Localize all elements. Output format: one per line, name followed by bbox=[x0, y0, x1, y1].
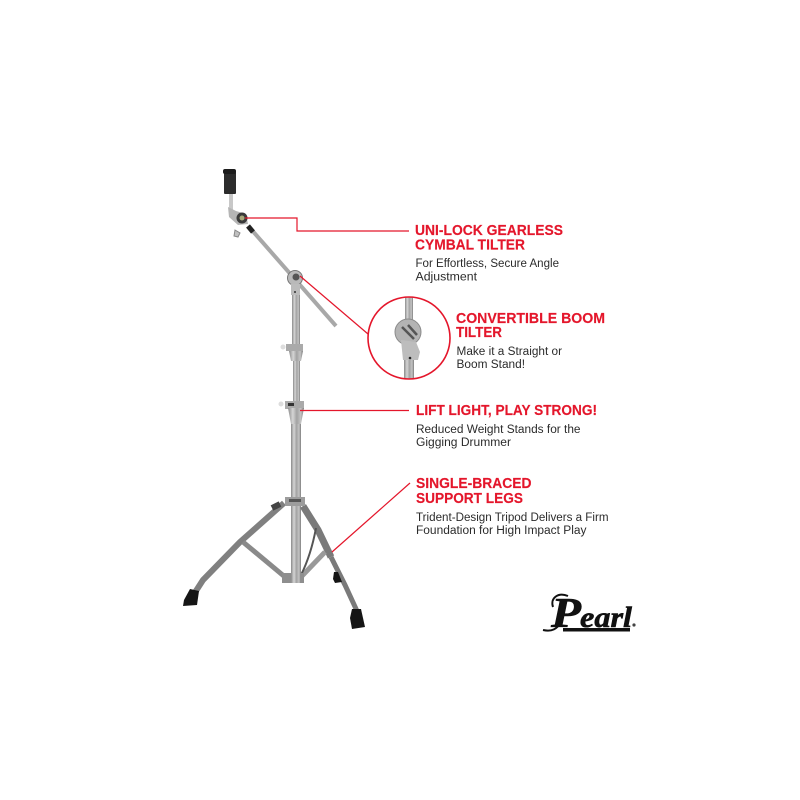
description: Boom Stand! bbox=[456, 359, 525, 371]
mast clamp upper bbox=[280, 344, 303, 408]
feature: support legs bbox=[416, 476, 608, 537]
Pearl logo bbox=[543, 591, 636, 637]
heading: CONVERTIBLE BOOM bbox=[456, 311, 605, 327]
boom pivot bbox=[288, 270, 302, 295]
Pearl logo: earl bbox=[580, 601, 633, 634]
mast clamp lower bbox=[278, 401, 304, 424]
feature: uni-lock tilter bbox=[415, 223, 563, 284]
rubber feet bbox=[183, 572, 365, 629]
description: For Effortless, Secure Angle bbox=[416, 258, 559, 270]
callout line: support legs bbox=[332, 483, 410, 552]
tripod left leg bbox=[194, 503, 285, 594]
heading: SINGLE-BRACED bbox=[416, 476, 532, 492]
lower mast bbox=[291, 410, 301, 582]
description: Reduced Weight Stands for the bbox=[416, 424, 580, 436]
description: Foundation for High Impact Play bbox=[416, 525, 587, 537]
description: Make it a Straight or bbox=[456, 346, 562, 358]
description: Adjustment bbox=[416, 272, 478, 284]
cymbal felt and post bbox=[223, 169, 236, 210]
Pearl logo: P bbox=[550, 591, 581, 637]
detail circle: boom tilter close-up bbox=[368, 297, 450, 379]
tripod right leg bbox=[301, 506, 357, 611]
upper mast bbox=[292, 284, 300, 350]
feature: lift light bbox=[416, 403, 597, 449]
callout line: lift light bbox=[300, 410, 409, 412]
callout line: boom tilter bbox=[300, 276, 368, 334]
heading: CYMBAL TILTER bbox=[415, 238, 525, 254]
description: Gigging Drummer bbox=[416, 437, 511, 449]
tripod brackets bbox=[282, 497, 305, 583]
heading: TILTER bbox=[456, 325, 502, 341]
cymbal boom stand bbox=[183, 169, 365, 629]
feature: convertible boom tilter bbox=[456, 311, 605, 371]
heading: LIFT LIGHT, PLAY STRONG! bbox=[416, 403, 597, 419]
heading: SUPPORT LEGS bbox=[416, 491, 523, 507]
cymbal tilter bbox=[228, 207, 248, 237]
callout line: cymbal tilter bbox=[245, 218, 409, 231]
description: Trident-Design Tripod Delivers a Firm bbox=[416, 512, 608, 524]
boom arm bbox=[248, 226, 336, 326]
heading: UNI-LOCK GEARLESS bbox=[415, 223, 563, 239]
